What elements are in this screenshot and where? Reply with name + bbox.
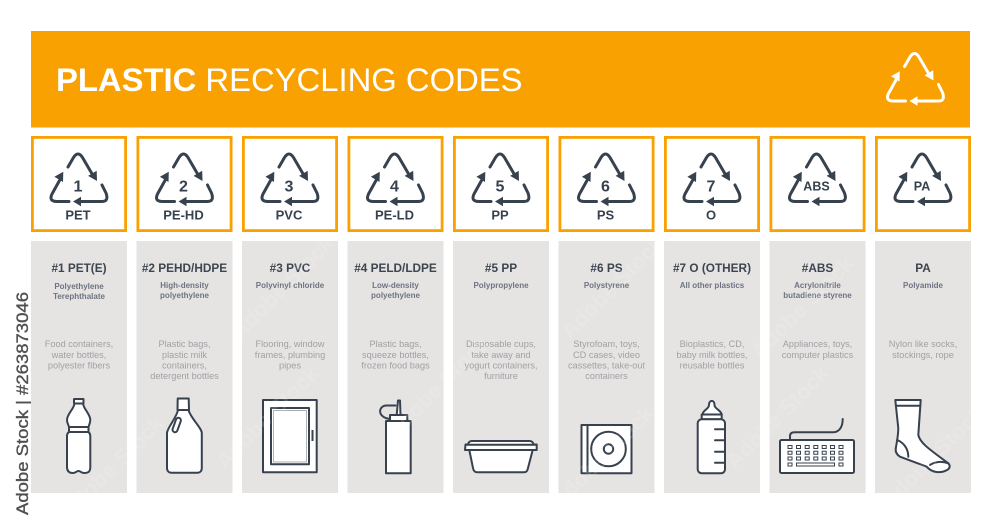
panel: ABS details: computer plastics: [782, 350, 854, 360]
icon: keyboard: [780, 419, 854, 473]
code box: PS: 6: [601, 178, 610, 196]
panel: PE-HD details: High-density: [160, 281, 209, 290]
panel: PVC details: #3 PVC: [270, 261, 311, 275]
panel: PP details: furniture: [484, 371, 518, 381]
code box: PVC: 3: [285, 178, 294, 196]
code box: PA: [876, 137, 970, 231]
panel: PE-HD details: plastic milk: [162, 350, 207, 360]
code box: PE-LD: 4: [390, 178, 399, 196]
icon: baby bottle: [698, 401, 725, 473]
icon: CD case: [582, 425, 632, 473]
panel: other details: reusable bottles: [680, 360, 745, 370]
column 5: PP: [453, 137, 549, 493]
panel: PS details: cassettes, take-out: [568, 360, 645, 370]
code box: PET: [32, 137, 126, 231]
watermark: Adobe Stock: [56, 410, 169, 524]
panel: PP details: [453, 241, 549, 493]
panel: PP details: take away and: [471, 350, 531, 360]
column 6: PS: [558, 137, 654, 493]
panel: ABS details: Acrylonitrile: [794, 281, 841, 290]
code box: PE-HD: 2: [179, 178, 188, 196]
panel: PVC details: frames, plumbing: [255, 350, 325, 360]
watermark: Adobe Stock: [746, 250, 859, 364]
panel: PE-HD details: containers,: [162, 360, 207, 370]
icon: detergent jug: [167, 398, 202, 473]
watermark: Adobe Stock: [556, 230, 669, 344]
panel: PVC details: [242, 241, 338, 493]
panel: PE-LD details: [348, 241, 444, 493]
panel: ABS details: #ABS: [802, 261, 833, 275]
code box: O: [665, 137, 759, 231]
panel: PE-LD details: Low-density: [372, 281, 419, 290]
column 7: O: [664, 137, 760, 493]
watermark: Adobe Stock: [546, 400, 659, 514]
panel: PS details: #6 PS: [590, 261, 623, 275]
panel: PE-LD details: Plastic bags,: [369, 339, 422, 349]
watermark: Adobe Stock: [381, 330, 494, 444]
code box: PE-HD: PE-HD: [163, 208, 204, 222]
code box: PS: [560, 137, 653, 231]
panel: other details: Bioplastics, CD,: [680, 339, 744, 349]
icon: squeeze bottle: [380, 400, 411, 473]
panel: PA details: stockings, rope: [892, 350, 954, 360]
code box: PA: PA: [914, 180, 930, 194]
panel: PA details: [875, 241, 971, 493]
panel: ABS details: [770, 241, 866, 493]
code box: ABS: [771, 137, 864, 231]
panel: PET details: Terephthalate: [53, 292, 105, 301]
panel: PP details: Disposable cups,: [466, 339, 536, 349]
panel: PE-HD details: polyethylene: [160, 291, 210, 300]
panel: PS details: Polystyrene: [584, 281, 630, 290]
panel: PE-HD details: [136, 241, 232, 493]
code box: ABS: ABS: [803, 180, 830, 194]
watermark: Adobe Stock: [226, 230, 339, 344]
panel: PS details: Styrofoam, toys,: [573, 339, 640, 349]
panel: PE-LD details: polyethylene: [371, 291, 420, 300]
watermark: Adobe Stock: [876, 400, 989, 514]
code box: PS: PS: [597, 208, 614, 222]
code box: O: O: [706, 208, 716, 222]
panel: PET details: #1 PET(E): [51, 261, 107, 275]
panel: PA details: Nylon like socks,: [889, 339, 957, 349]
code box: PP: 5: [496, 178, 505, 196]
code box: PE-LD: [349, 137, 442, 231]
panel: PET details: [31, 241, 127, 493]
column 2: PE-HD: [136, 137, 232, 493]
code box: PE-LD: PE-LD: [375, 208, 414, 222]
column 9: PA: [875, 137, 971, 493]
panel: PE-LD details: squeeze bottles,: [362, 350, 429, 360]
code box: PP: PP: [491, 208, 509, 222]
panel: PP details: yogurt containers,: [464, 360, 538, 370]
panel: PVC details: Polyvinyl chloride: [256, 281, 325, 290]
panel: PE-HD details: detergent bottles: [150, 371, 219, 381]
icon: sock: [895, 400, 950, 472]
icon: window: [263, 400, 317, 472]
panel: PET details: polyester fibers: [48, 360, 111, 370]
watermark: Adobe Stock: [721, 360, 834, 474]
panel: PP details: #5 PP: [485, 261, 517, 275]
panel: other details: All other plastics: [680, 281, 745, 290]
panel: PS details: CD cases, video: [573, 350, 640, 360]
panel: PET details: water bottles,: [51, 350, 106, 360]
icon: water bottle: [67, 399, 90, 473]
panel: other details: [664, 241, 760, 493]
panel: PP details: Polypropylene: [473, 281, 529, 290]
column 3: PVC: [242, 137, 338, 493]
code box: PE-HD: [138, 137, 231, 231]
panel: PE-LD details: frozen food bags: [361, 360, 430, 370]
code box: PVC: [243, 137, 337, 231]
panel: PE-LD details: #4 PELD/LDPE: [354, 261, 437, 275]
panel: PE-HD details: Plastic bags,: [158, 339, 211, 349]
column 8: ABS: [770, 137, 866, 493]
panel: PVC details: pipes: [279, 360, 301, 370]
panel: ABS details: butadiene styrene: [783, 291, 852, 300]
code box: PP: [454, 137, 548, 231]
panel: ABS details: Appliances, toys,: [783, 339, 852, 349]
icon: header recycling symbol: [887, 54, 943, 106]
panel: PET details: Polyethylene: [54, 282, 104, 291]
watermark: Adobe Stock: [211, 360, 324, 474]
column 4: PE-LD: [348, 137, 444, 493]
panel: PS details: containers: [585, 371, 628, 381]
title: PLASTIC RECYCLING CODES: [56, 61, 523, 98]
panel: PE-HD details: #2 PEHD/HDPE: [142, 261, 227, 275]
code box: PET: 1: [74, 178, 83, 196]
watermark: [56, 230, 989, 524]
panel: PA details: Polyamide: [903, 281, 944, 290]
panel: PVC details: Flooring, window: [256, 339, 325, 349]
code box: PVC: PVC: [276, 208, 303, 222]
header banner: [31, 31, 970, 128]
code box: O: 7: [707, 178, 716, 196]
column 1: PET: [31, 137, 127, 493]
panel: PA details: PA: [915, 261, 931, 275]
panel: other details: baby milk bottles,: [677, 350, 747, 360]
panel: other details: #7 O (OTHER): [673, 261, 751, 275]
code box: PET: PET: [65, 208, 91, 222]
stock credit vertical text: Adobe Stock | #263873046: [14, 292, 32, 515]
panel: PS details: [558, 241, 654, 493]
icon: food tub: [465, 441, 537, 472]
panel: PET details: Food containers,: [45, 339, 113, 349]
